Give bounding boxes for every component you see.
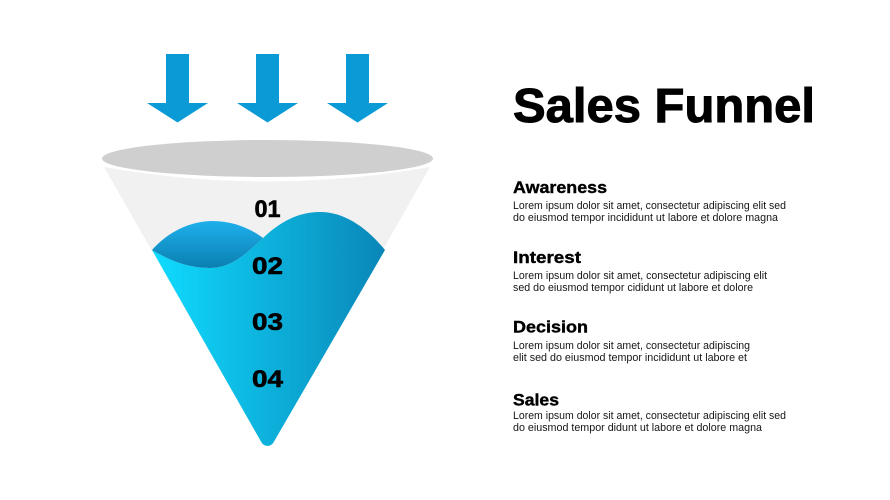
heading: Awareness bbox=[513, 178, 607, 197]
body text: Lorem ipsum dolor sit amet, consectetur adipiscing elit sed bbox=[513, 410, 786, 422]
body text bbox=[513, 270, 767, 294]
arrows bbox=[147, 54, 388, 122]
funnel upper cone bbox=[104, 167, 430, 446]
block: interest bbox=[513, 248, 767, 294]
block: awareness bbox=[513, 178, 786, 224]
arrow 1 bbox=[147, 54, 208, 122]
heading: Sales bbox=[513, 390, 559, 410]
body text: Lorem ipsum dolor sit amet, consectetur adipiscing elit sed bbox=[513, 200, 786, 212]
body text: Lorem ipsum dolor sit amet, consectetur adipiscing elit bbox=[513, 270, 767, 282]
heading: Decision bbox=[513, 318, 588, 336]
funnel rim ellipse bbox=[102, 140, 433, 177]
heading: Interest bbox=[513, 248, 581, 267]
step number 03: 03 bbox=[252, 309, 283, 336]
arrow 2 bbox=[237, 54, 298, 122]
block: decision bbox=[513, 318, 750, 364]
body text bbox=[513, 410, 786, 434]
block: sales bbox=[513, 390, 786, 434]
step number 02: 02 bbox=[252, 253, 283, 280]
step number 01: 01 bbox=[254, 196, 280, 223]
funnel bbox=[102, 140, 433, 446]
liquid inner surface bbox=[152, 221, 263, 268]
step number 04: 04 bbox=[252, 366, 284, 393]
body text bbox=[513, 340, 750, 364]
body text: do eiusmod tempor incididunt ut labore et dolore magna bbox=[513, 212, 779, 224]
funnel blue liquid bbox=[152, 212, 385, 446]
title: Sales Funnel bbox=[513, 80, 815, 133]
body text: sed do eiusmod tempor cididunt ut labore et dolore bbox=[513, 282, 753, 294]
body text bbox=[513, 200, 786, 224]
body text: Lorem ipsum dolor sit amet, consectetur adipiscing bbox=[513, 340, 750, 352]
body text: elit sed do eiusmod tempor incididunt ut labore et bbox=[513, 352, 747, 364]
body text: do eiusmod tempor didunt ut labore et dolore magna bbox=[513, 422, 763, 434]
arrow 3 bbox=[327, 54, 388, 122]
